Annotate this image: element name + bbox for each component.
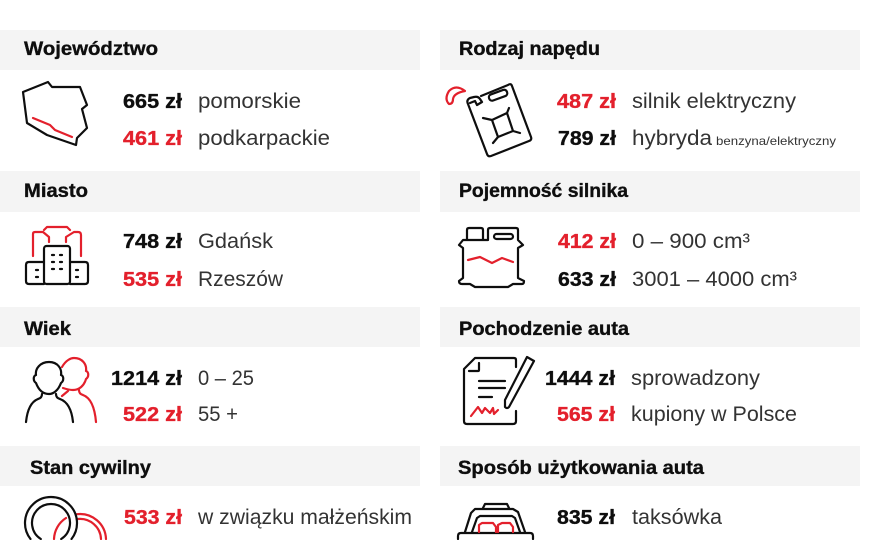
icon: taxi bbox=[458, 504, 533, 539]
heading band: Rodzaj napędu: Rodzaj napędu bbox=[459, 39, 600, 60]
row: 3001–4000: 3001 – 4000 cm³ bbox=[632, 268, 797, 291]
row: pomorskie: 665 zł bbox=[123, 91, 182, 113]
icon: two people bbox=[26, 358, 96, 422]
row: 0–25 bbox=[111, 367, 254, 390]
row: taksówka: taksówka bbox=[632, 506, 722, 529]
heading band: Stan cywilny bbox=[0, 446, 420, 486]
icon: map of Poland bbox=[23, 82, 87, 145]
row: 0–25: 0 – 25 bbox=[198, 367, 254, 390]
row: kupiony w Polsce bbox=[557, 403, 797, 426]
row: kupiony w Polsce: 565 zł bbox=[557, 404, 615, 426]
icon: signed document bbox=[464, 357, 534, 424]
panel: Rodzaj napędu bbox=[440, 30, 860, 156]
row: sprowadzony: sprowadzony bbox=[631, 367, 761, 390]
panel: Pojemność silnika bbox=[440, 171, 860, 291]
row: sprowadzony bbox=[545, 367, 761, 390]
icon: fuel canister bbox=[446, 84, 531, 156]
heading band: Wiek bbox=[0, 307, 420, 347]
icon: city buildings bbox=[26, 227, 88, 284]
panel: Województwo bbox=[0, 30, 420, 150]
heading band: Miasto: Miasto bbox=[24, 181, 88, 202]
heading band: Rodzaj napędu bbox=[440, 30, 860, 70]
row: pomorskie: pomorskie bbox=[198, 90, 301, 113]
panel: Stan cywilny bbox=[0, 446, 420, 539]
row: 55+: 55 + bbox=[198, 403, 238, 426]
row: hybryda: hybryda bbox=[632, 127, 712, 150]
row: hybryda: benzyna/elektryczny bbox=[716, 134, 836, 148]
heading band: Miasto bbox=[0, 171, 420, 212]
row: 0–900 bbox=[558, 230, 750, 253]
row: podkarpackie bbox=[123, 127, 330, 150]
panel: Pochodzenie auta bbox=[440, 307, 860, 426]
row: Rzeszów bbox=[123, 268, 284, 291]
row: 3001–4000: 633 zł bbox=[558, 269, 616, 291]
row: sprowadzony: 1444 zł bbox=[545, 368, 615, 390]
row: Rzeszów: Rzeszów bbox=[198, 268, 284, 291]
row: silnik elektryczny: silnik elektryczny bbox=[632, 90, 797, 113]
icon: engine canister bbox=[459, 228, 524, 287]
row: 0–900: 0 – 900 cm³ bbox=[632, 230, 750, 253]
row: Gdańsk: Gdańsk bbox=[198, 230, 274, 253]
heading band: Sposób użytkowania auta bbox=[440, 446, 860, 486]
heading band: Województwo: Województwo bbox=[24, 39, 158, 60]
row: Gdańsk bbox=[123, 230, 274, 253]
row: 0–900: 412 zł bbox=[558, 231, 616, 253]
row: podkarpackie: 461 zł bbox=[123, 128, 182, 150]
heading band: Stan cywilny: Stan cywilny bbox=[30, 458, 151, 479]
panel: Sposób użytkowania auta bbox=[440, 446, 860, 539]
heading band: Województwo bbox=[0, 30, 420, 70]
row: taksówka bbox=[557, 506, 722, 529]
row: silnik elektryczny: 487 zł bbox=[557, 91, 616, 113]
row: podkarpackie: podkarpackie bbox=[198, 127, 330, 150]
row: w związku małżeńskim: 533 zł bbox=[124, 507, 182, 529]
row: 55+ bbox=[123, 403, 238, 426]
heading band: Wiek: Wiek bbox=[24, 319, 71, 340]
row: hybryda bbox=[558, 127, 836, 150]
row: hybryda: 789 zł bbox=[558, 128, 616, 150]
icon: wedding rings bbox=[25, 497, 106, 539]
heading band: Sposób użytkowania auta: Sposób użytkowania auta bbox=[458, 458, 704, 479]
row: pomorskie bbox=[123, 90, 301, 113]
panel: Wiek bbox=[0, 307, 420, 426]
panel: Miasto bbox=[0, 171, 420, 291]
row: Rzeszów: 535 zł bbox=[123, 269, 182, 291]
row: Gdańsk: 748 zł bbox=[123, 231, 182, 253]
row: 55+: 522 zł bbox=[123, 404, 182, 426]
row: 3001–4000 bbox=[558, 268, 797, 291]
heading band: Pochodzenie auta: Pochodzenie auta bbox=[459, 319, 629, 340]
row: silnik elektryczny bbox=[557, 90, 797, 113]
row: w związku małżeńskim: w związku małżeńskim bbox=[197, 506, 412, 529]
row: kupiony w Polsce: kupiony w Polsce bbox=[631, 403, 797, 426]
heading band: Pochodzenie auta bbox=[440, 307, 860, 347]
heading band: Pojemność silnika bbox=[440, 171, 860, 212]
heading band: Pojemność silnika: Pojemność silnika bbox=[459, 181, 628, 202]
row: 0–25: 1214 zł bbox=[111, 368, 182, 390]
row: taksówka: 835 zł bbox=[557, 507, 615, 529]
